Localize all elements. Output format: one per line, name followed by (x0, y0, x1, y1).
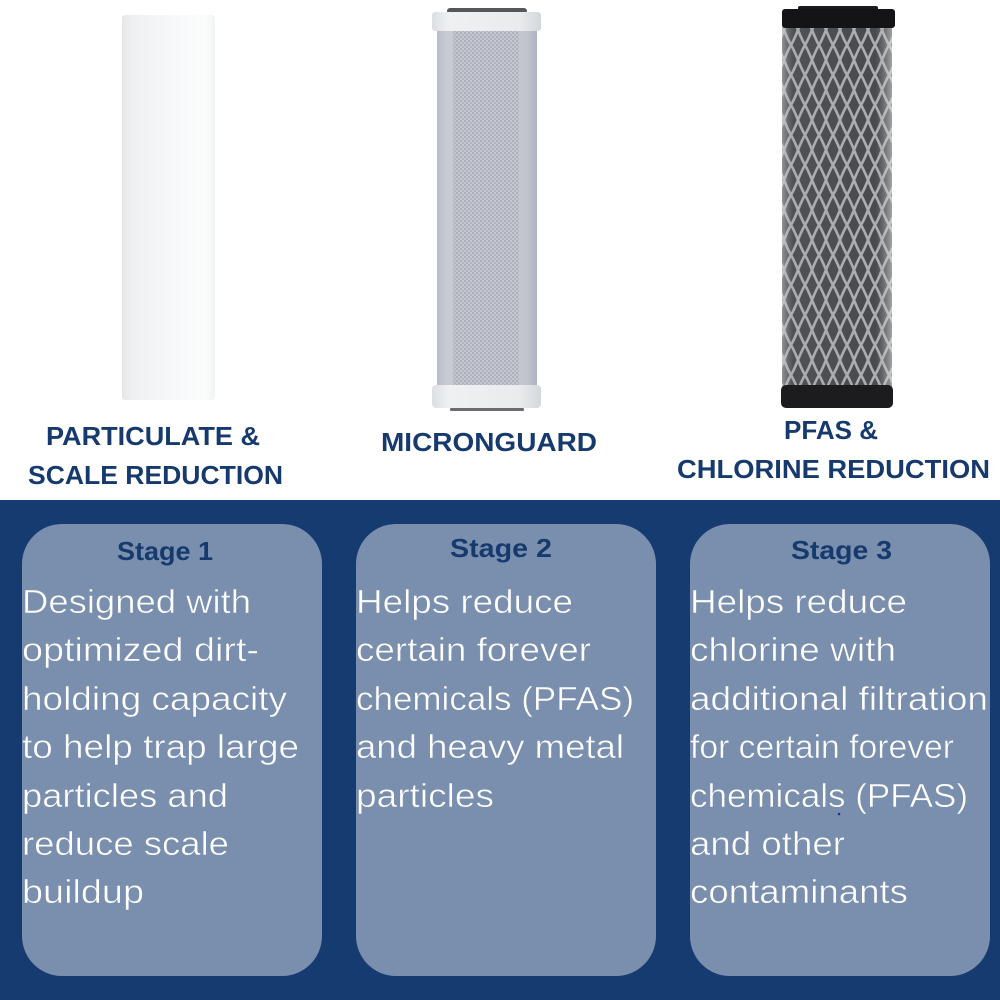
heading: pfas and chlorine reduction: CHLORINE REDUCTION (677, 454, 990, 484)
filter: stage 2 carbon block cartridge with white caps (432, 8, 541, 411)
stage 3 description: for certain forever (690, 729, 954, 766)
heading: particulate and scale reduction: PARTICULATE & (46, 421, 260, 451)
stage 3 description: Helps reduce (690, 584, 907, 621)
stage 1 description: to help trap large (22, 729, 299, 766)
stage 1 description: reduce scale (22, 826, 229, 863)
panel: navy footer background (0, 500, 1000, 1000)
stage 1 label: Stage 1 (117, 536, 213, 566)
heading: pfas and chlorine reduction (677, 415, 990, 484)
stage 2 description: particles (356, 778, 494, 815)
panel: stage 3 card (690, 524, 990, 976)
stage 2 description: chemicals (PFAS) (356, 681, 634, 718)
stage 2 label: Stage 2 (450, 533, 552, 563)
stage 1 description: particles and (22, 778, 228, 815)
filter: stage 3 black capped carbon net cartridge (781, 6, 895, 408)
stage 3 description (690, 584, 988, 911)
heading: particulate and scale reduction (28, 421, 283, 490)
stage 2 description: and heavy metal (356, 729, 624, 766)
panel: stage 2 card (356, 524, 656, 976)
stage 1 description: buildup (22, 874, 144, 911)
heading: microguard: MICRONGUARD (381, 427, 597, 457)
stage 3 label: Stage 3 (791, 535, 892, 565)
stage 3 description: chlorine with (690, 632, 896, 669)
stage 2 description: Helps reduce (356, 584, 573, 621)
heading: particulate and scale reduction: SCALE REDUCTION (28, 460, 283, 490)
stage 1 description: optimized dirt- (22, 632, 259, 669)
heading: pfas and chlorine reduction: PFAS & (784, 415, 878, 445)
stage 1 description: Designed with (22, 584, 251, 621)
panel: stage 1 card (22, 524, 322, 976)
stage 3 description: additional filtration (690, 681, 988, 718)
filter: stage 1 white sediment cartridge (122, 15, 215, 400)
stage 3 description: contaminants (690, 874, 908, 911)
stage 1 description: holding capacity (22, 681, 287, 718)
stage 1 description (22, 584, 299, 911)
stage 3 description: and other (690, 826, 845, 863)
stage 2 description (356, 584, 634, 815)
stage 3 description: chemicals (PFAS) (690, 778, 968, 815)
stage 2 description: certain forever (356, 632, 591, 669)
